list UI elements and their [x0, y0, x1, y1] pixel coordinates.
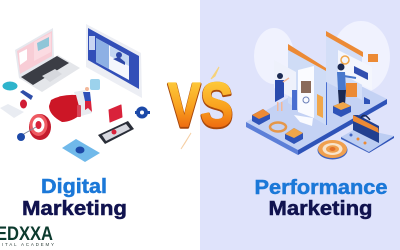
icon: briefcase [353, 115, 379, 143]
paper report [294, 66, 314, 126]
icon: target disc [318, 140, 348, 160]
logo: Edxxa Digital Academy: ITAL ACADEMY [2, 242, 54, 247]
icon: red badge [20, 100, 27, 108]
decorative white blob right [332, 21, 390, 93]
icon: laptop [15, 28, 80, 92]
screen: right panel [326, 31, 378, 104]
icon: person with megaphone [83, 87, 92, 112]
icon: blue pill [20, 90, 33, 100]
icon: chat bubble [90, 79, 100, 90]
heading: Performance Marketing: Marketing [268, 198, 372, 220]
small tray [341, 128, 394, 153]
figure: woman [275, 73, 289, 111]
decorative white blob left [254, 28, 294, 84]
screen: left panel [274, 44, 327, 125]
heading: Digital Marketing [22, 176, 127, 220]
VS badge: VS [168, 71, 233, 140]
heading: Performance Marketing [254, 177, 388, 220]
heading: Digital Marketing: Digital [41, 176, 107, 198]
pedestal [333, 102, 351, 117]
icon: magnifier [2, 82, 18, 90]
icon: video badge [109, 105, 122, 122]
icon: smartphone [98, 121, 134, 144]
illustration: performance marketing [246, 21, 394, 160]
panel: performance marketing background [200, 0, 400, 250]
chart: donut [270, 122, 286, 132]
icon: lightning spark top [211, 67, 219, 79]
figure: man [337, 64, 356, 105]
box: left [252, 109, 270, 125]
heading: Performance Marketing: Performance [254, 177, 388, 199]
illustration: digital marketing [0, 24, 150, 162]
VS badge: VS [168, 72, 233, 141]
icon: gear [135, 106, 150, 118]
icon: lightning spark bottom [181, 133, 191, 149]
heading: Digital Marketing: Marketing [22, 198, 127, 220]
icon: target with dart [17, 114, 51, 141]
platform [246, 72, 387, 155]
icon: envelope [0, 104, 24, 118]
icon: video card [62, 139, 100, 162]
icon: megaphone [49, 90, 92, 122]
box: front [285, 128, 303, 144]
icon: monitor [86, 24, 142, 98]
